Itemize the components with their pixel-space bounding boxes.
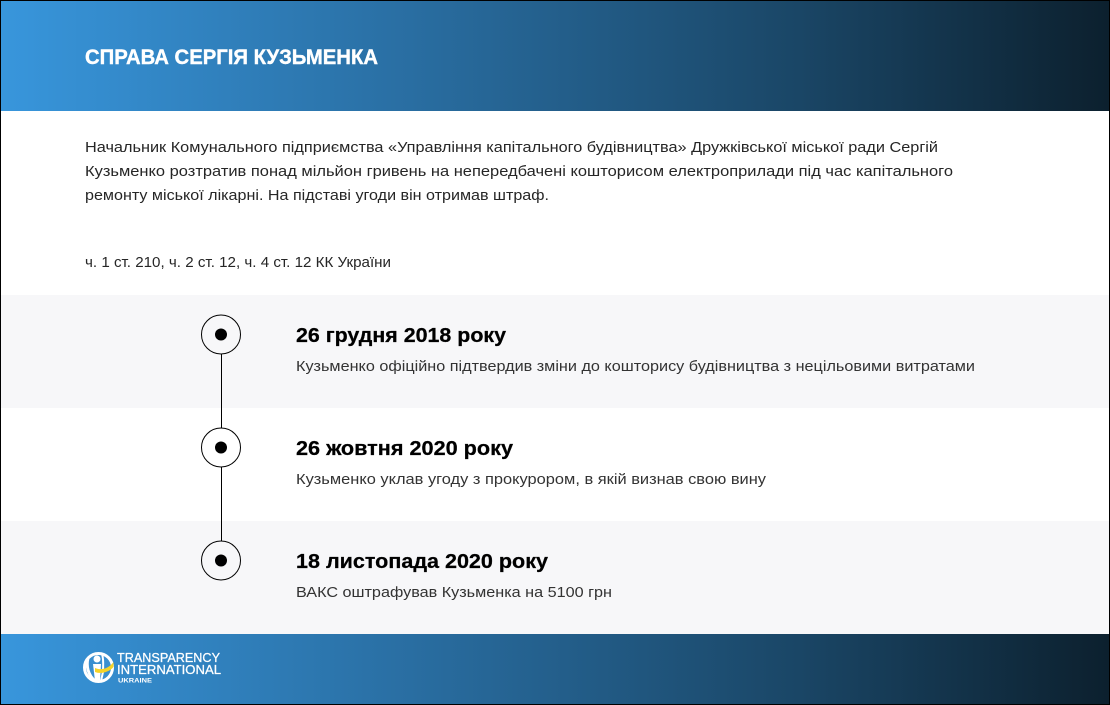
intro paragraph: Кузьменко розтратив понад мільйон гривень на непередбачені кошторисом електроприлади під час капітального <box>85 164 953 180</box>
event 1 date: 26 грудня 2018 року <box>296 325 507 347</box>
event 2 date: 26 жовтня 2020 року <box>296 438 514 460</box>
logo text <box>117 651 221 684</box>
title: СПРАВА СЕРГІЯ КУЗЬМЕНКА <box>85 46 378 69</box>
marker 3 <box>202 541 240 580</box>
event 3 description: ВАКС оштрафував Кузьменка на 5100 грн <box>296 585 612 601</box>
timeline row 3 background <box>1 521 1109 634</box>
event 1 description: Кузьменко офіційно підтвердив зміни до кошторису будівництва з нецільовими витратами <box>296 359 975 375</box>
marker 2 <box>202 428 240 467</box>
legal articles: ч. 1 ст. 210, ч. 2 ст. 12, ч. 4 ст. 12 КК України <box>85 255 391 271</box>
intro paragraph: Начальник Комунального підприємства «Управління капітального будівництва» Дружківської міської ради Сергій <box>85 140 938 156</box>
intro paragraph <box>85 140 953 204</box>
event 2 description: Кузьменко уклав угоду з прокурором, в якій визнав свою вину <box>296 472 767 488</box>
logo emblem <box>84 654 114 682</box>
header banner <box>1 1 1109 111</box>
logo text: TRANSPARENCY <box>117 651 221 665</box>
timeline event 3 <box>202 541 612 601</box>
logo: Transparency International Ukraine <box>84 651 221 684</box>
footer banner <box>1 634 1109 704</box>
timeline row 1 background <box>1 295 1109 408</box>
logo text: INTERNATIONAL <box>117 663 221 677</box>
marker 1 <box>202 315 240 354</box>
logo text: UKRAINE <box>118 678 153 684</box>
timeline event 2 <box>202 428 767 488</box>
event 3 date: 18 листопада 2020 року <box>296 551 549 573</box>
timeline event 1 <box>202 315 975 375</box>
timeline connector line <box>220 354 222 541</box>
intro paragraph: ремонту міської лікарні. На підставі угоди він отримав штраф. <box>85 188 549 204</box>
